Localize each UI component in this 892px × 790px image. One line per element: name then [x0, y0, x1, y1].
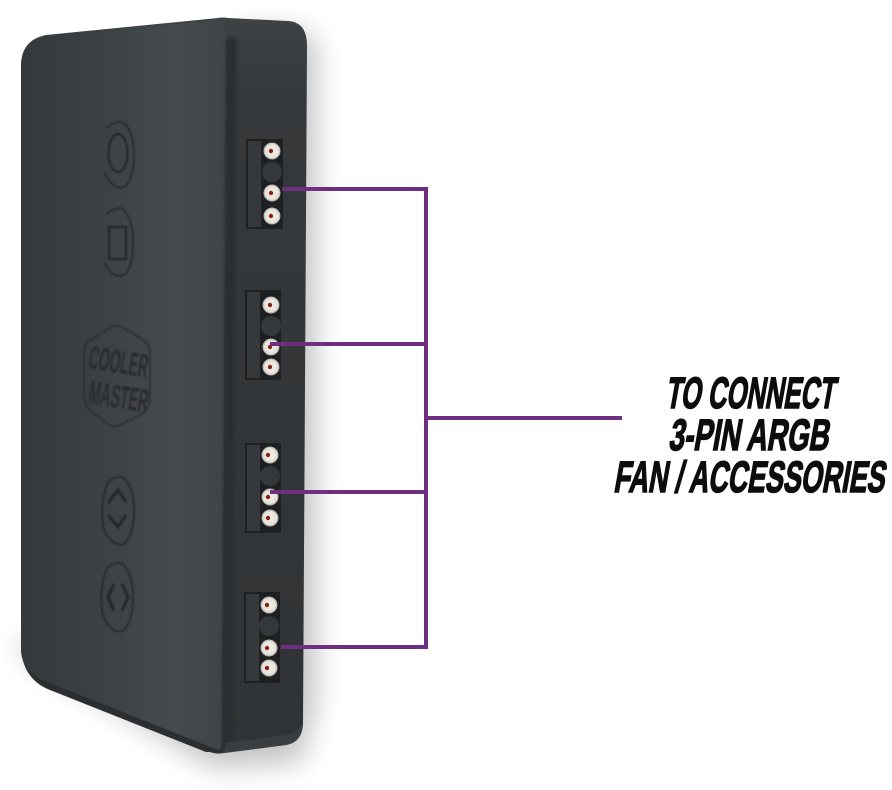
bracket connector lines: [270, 189, 622, 647]
device: ARGB controller hub: MASTER: [86, 374, 151, 420]
callout label: [611, 369, 891, 502]
device: ARGB controller hub: COOLER: [86, 339, 151, 385]
device body side face: [21, 18, 307, 754]
port 3: [246, 444, 280, 532]
device shadow: [15, 30, 316, 768]
device front face: [21, 20, 226, 750]
bottom edge bevel: [21, 650, 224, 752]
button: square: [104, 208, 133, 276]
port 4: [245, 593, 279, 682]
logo: Cooler Master badge: [84, 326, 151, 426]
device: ARGB controller hub: [21, 18, 307, 754]
button: circle: [104, 122, 134, 187]
button: up/down arrows: [102, 477, 134, 544]
port 1: [247, 140, 282, 228]
button: left/right arrows: [101, 563, 133, 631]
port 2: [246, 291, 281, 379]
side groove: [222, 37, 237, 748]
